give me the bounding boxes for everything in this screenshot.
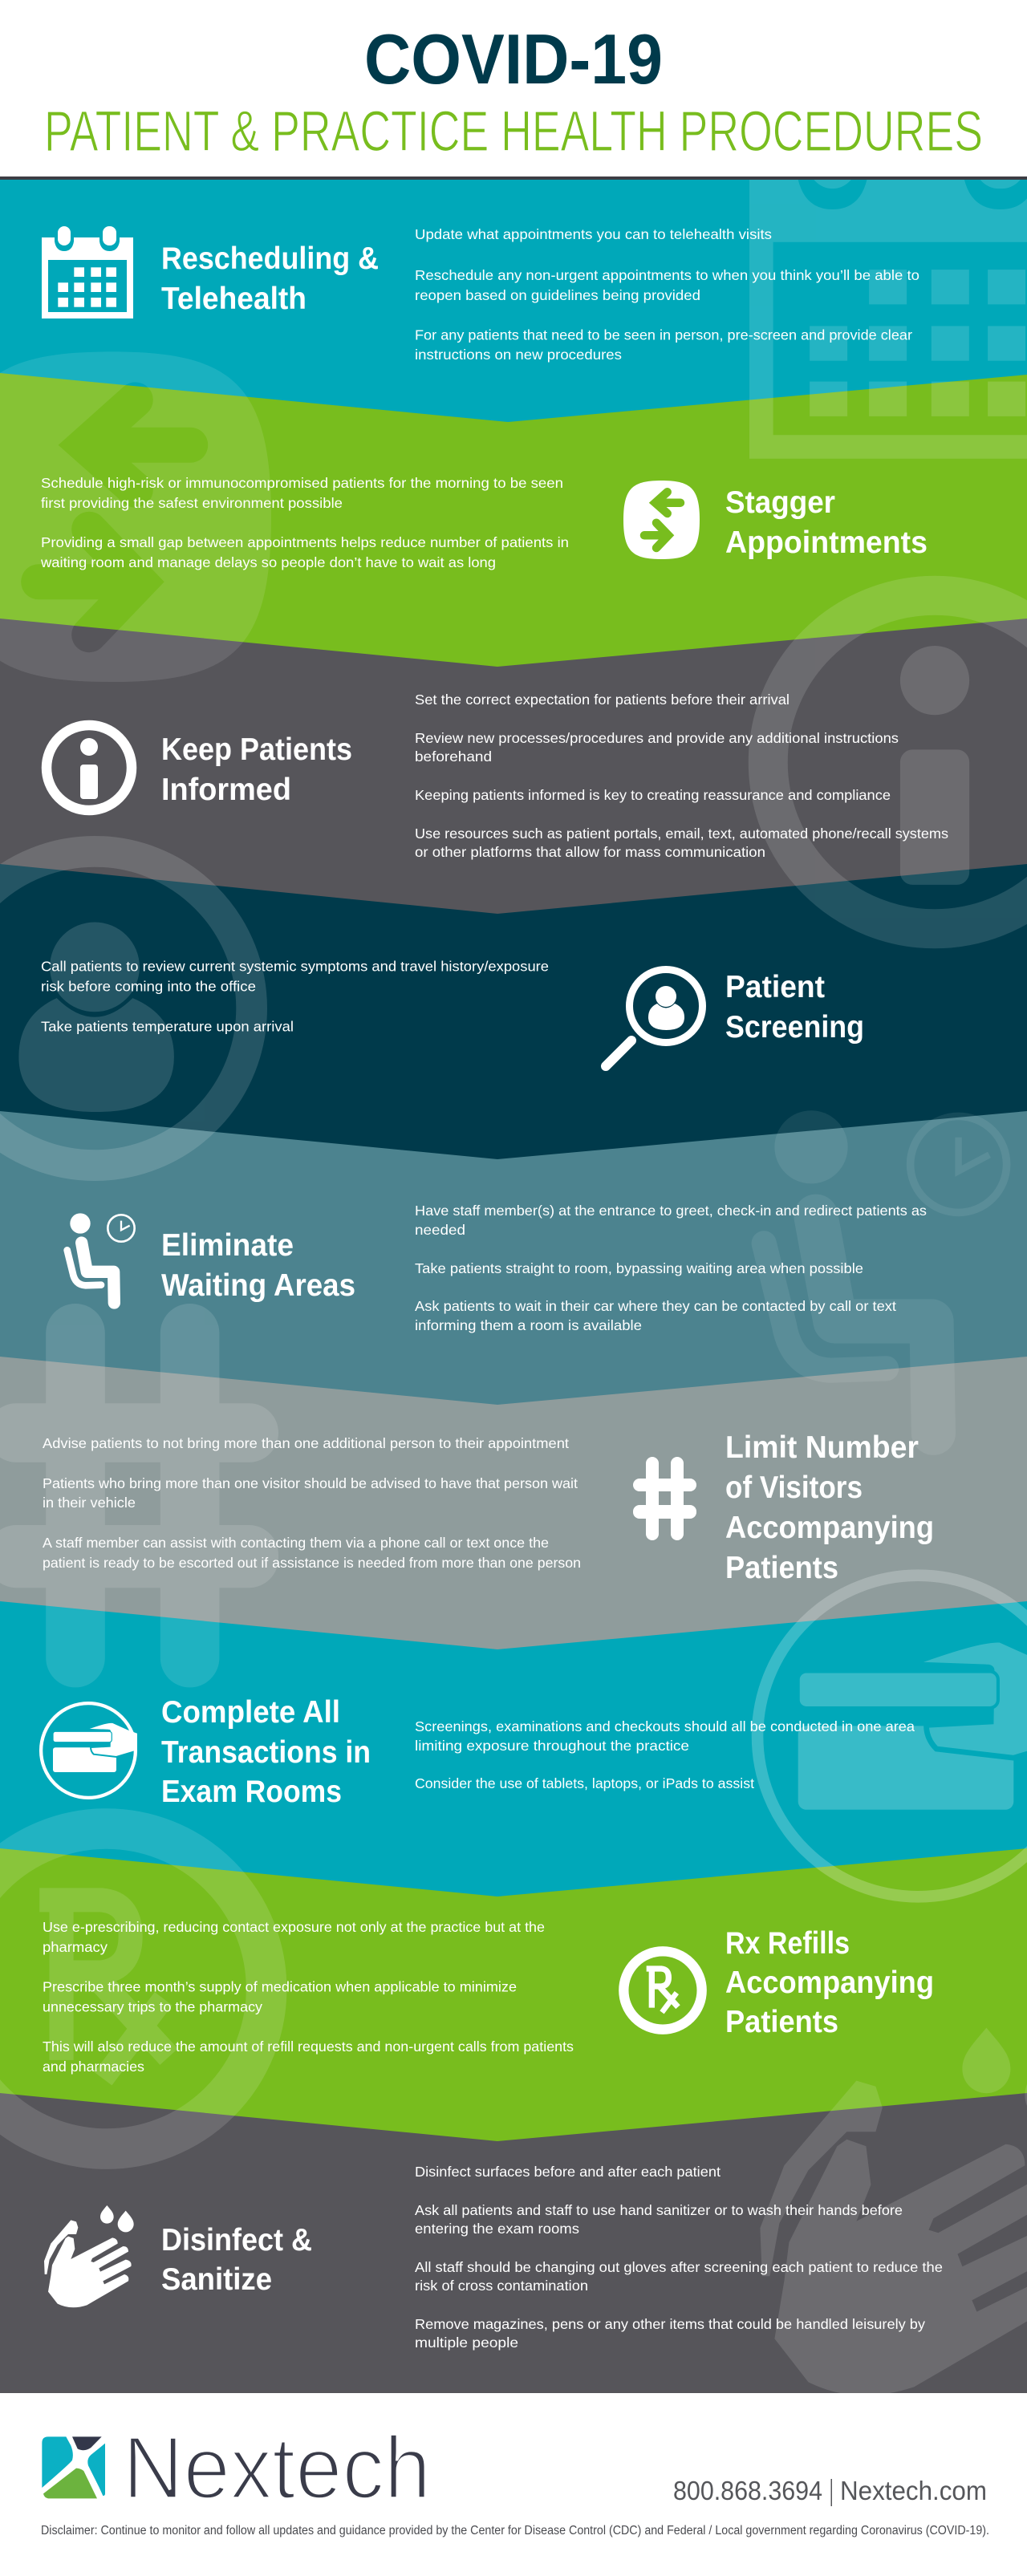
heading: screening: Patient — [725, 970, 825, 1004]
icon: washing hand — [44, 2205, 134, 2307]
text: disinfect points: Remove magazines, pens or any other items that could be handled leisurely by — [415, 2316, 925, 2332]
panel background: informed grey band — [0, 619, 1027, 923]
text: waiting points: Ask patients to wait in their car where they can be contacted by call or text — [415, 1298, 896, 1314]
text: refills points — [43, 1919, 574, 2075]
text: screening points: risk before coming into the office — [41, 979, 256, 995]
heading: informed: Keep Patients — [161, 732, 352, 767]
text: refills points: unnecessary trips to the pharmacy — [43, 1999, 262, 2015]
header — [0, 0, 1027, 180]
icon: Rx — [623, 1951, 702, 2030]
text: visitors points: Advise patients to not bring more than one additional person to their appointment — [43, 1435, 569, 1451]
heading: visitors: Limit Number — [725, 1430, 919, 1465]
text: informed points: Use resources such as patient portals, email, text, automated phone/recall systems — [415, 826, 948, 842]
heading: disinfect: Sanitize — [161, 2262, 272, 2297]
heading: visitors: Patients — [725, 1551, 838, 1585]
text: rescheduling points: Update what appointments you can to telehealth visits — [415, 226, 772, 242]
heading: transactions: Exam Rooms — [161, 1775, 342, 1809]
panel background: transactions teal band — [0, 1601, 1027, 1901]
logo wordmark: Nextech — [123, 2419, 431, 2517]
watermark: large hash — [0, 1304, 278, 1687]
text: screening points — [41, 958, 549, 1035]
watermark: large Rx — [0, 1829, 266, 2149]
watermark: large info symbol — [768, 595, 1027, 929]
watermark: large credit card — [741, 1561, 1027, 1911]
text: disinfect points: multiple people — [415, 2335, 518, 2351]
text: rescheduling points: instructions on new procedures — [415, 347, 622, 363]
panel: keep patients informed — [47, 692, 948, 860]
watermark: large calendar — [749, 117, 1027, 459]
heading: disinfect: Disinfect & — [161, 2223, 312, 2258]
text: visitors points: Patients who bring more than one visitor should be advised to have that person wait — [43, 1475, 578, 1491]
text: rescheduling points: reopen based on guidelines being provided — [415, 287, 700, 303]
heading: waiting: Waiting Areas — [161, 1268, 355, 1303]
watermark: large seated person — [696, 1089, 1027, 1479]
text: screening points: Call patients to review current systemic symptoms and travel history/exposure — [41, 958, 549, 974]
text: disinfect points: Ask all patients and staff to use hand sanitizer or to wash their hands before — [415, 2202, 903, 2218]
text: transactions points: limiting exposure throughout the practice — [415, 1738, 689, 1754]
heading: rescheduling: Telehealth — [161, 282, 306, 316]
heading: screening — [725, 970, 864, 1045]
heading: informed: Informed — [161, 773, 291, 807]
panel background: stagger green band — [0, 373, 1027, 674]
heading: transactions: Complete All — [161, 1695, 340, 1730]
text: visitors points: A staff member can assist with contacting them via a phone call or text once the — [43, 1535, 549, 1551]
text: disinfect points: risk of cross contamination — [415, 2278, 588, 2294]
text: refills points: pharmacy — [43, 1939, 108, 1955]
heading: refills: Rx Refills — [725, 1926, 850, 1961]
text: transactions points: Consider the use of tablets, laptops, or iPads to assist — [415, 1775, 754, 1791]
text: refills points: Use e-prescribing, reducing contact exposure not only at the practice but at the — [43, 1919, 545, 1935]
text: stagger points: first providing the safest environment possible — [41, 495, 343, 511]
text: waiting points — [415, 1203, 927, 1333]
text: rescheduling points: For any patients that need to be seen in person, pre-screen and provide clear — [415, 327, 912, 343]
text: refills points: This will also reduce the amount of refill requests and non-urgent calls from patients — [43, 2038, 574, 2055]
text: informed points: Review new processes/procedures and provide any additional instructions — [415, 730, 899, 746]
panel: rx refills — [43, 1919, 934, 2075]
icon: card in hand — [36, 1699, 140, 1802]
panel: disinfect and sanitize — [44, 2164, 943, 2351]
title: COVID-19 — [364, 19, 663, 99]
panel background: waiting slate band — [0, 1111, 1027, 1412]
text: refills points: Prescribe three month’s supply of medication when applicable to minimize — [43, 1978, 517, 1994]
heading: rescheduling — [161, 241, 379, 316]
text: waiting points: Have staff member(s) at the entrance to greet, check-in and redirect patients as — [415, 1203, 927, 1219]
text: waiting points: needed — [415, 1222, 465, 1238]
heading: visitors: of Visitors — [725, 1471, 863, 1505]
icon: calendar — [42, 226, 133, 318]
heading: transactions: Transactions in — [161, 1735, 371, 1770]
text: rescheduling points — [415, 226, 919, 363]
text: disinfect points: entering the exam rooms — [415, 2221, 579, 2237]
text: disinfect points: All staff should be changing out gloves after screening each patient to reduce the — [415, 2259, 943, 2275]
text: stagger points — [40, 475, 569, 570]
text: informed points: Set the correct expectation for patients before their arrival — [415, 692, 790, 708]
text: stagger points: Schedule high-risk or immunocompromised patients for the morning to be seen — [41, 475, 563, 491]
panel: complete all transactions in exam rooms — [36, 1695, 915, 1809]
contact line — [673, 2476, 987, 2506]
panel: eliminate waiting areas — [48, 1203, 927, 1333]
text: waiting points: informing them a room is available — [415, 1317, 642, 1333]
watermark: large washing hand — [760, 2028, 1027, 2395]
heading: waiting: Eliminate — [161, 1228, 294, 1263]
text: informed points — [415, 692, 948, 860]
contact line: Nextech.com — [840, 2476, 987, 2505]
panel background: refills green band — [0, 1848, 1027, 2150]
contact line: 800.868.3694 — [673, 2476, 822, 2505]
text: refills points: and pharmacies — [43, 2059, 144, 2075]
text: informed points: or other platforms that allow for mass communication — [415, 844, 765, 860]
panel: rescheduling and telehealth — [42, 226, 919, 363]
heading: refills: Accompanying — [725, 1965, 934, 2000]
icon: seated person with clock — [48, 1207, 152, 1316]
icon: Nextech logo mark — [42, 2436, 105, 2498]
text: disinfect points: Disinfect surfaces before and after each patient — [415, 2164, 721, 2180]
heading: transactions — [161, 1695, 371, 1809]
text: screening points: Take patients temperature upon arrival — [41, 1019, 294, 1035]
text: transactions points: Screenings, examinations and checkouts should all be conducted in one area — [415, 1718, 915, 1734]
icon: info — [47, 725, 132, 810]
panel background: visitors grey band — [0, 1357, 1027, 1653]
text: informed points: Keeping patients informed is key to creating reassurance and compliance — [415, 787, 891, 803]
heading: disinfect — [161, 2223, 312, 2297]
heading: screening: Screening — [725, 1010, 864, 1045]
panel background: sanitize grey band — [0, 2093, 1027, 2393]
heading: visitors: Accompanying — [725, 1511, 934, 1545]
heading: waiting — [161, 1228, 355, 1303]
panel: patient screening — [41, 958, 864, 1066]
text: stagger points: waiting room and manage delays so people don’t have to wait as long — [40, 554, 496, 570]
heading: stagger: Stagger — [725, 485, 835, 520]
footer — [0, 2393, 1027, 2576]
text: visitors points: in their vehicle — [43, 1495, 136, 1511]
panel: stagger appointments — [40, 475, 928, 570]
heading: rescheduling: Rescheduling & — [161, 241, 379, 276]
text: disinfect points — [415, 2164, 943, 2351]
text: stagger points: Providing a small gap between appointments helps reduce number of patients in — [41, 534, 569, 550]
watermark: large stagger arrows — [0, 339, 298, 696]
heading: informed — [161, 732, 352, 807]
text: transactions points — [415, 1718, 915, 1791]
icon: hash — [633, 1457, 696, 1540]
icon: stagger arrows — [618, 477, 706, 562]
text: waiting points: Take patients straight to room, bypassing waiting area when possible — [415, 1260, 863, 1276]
panel: limit number of visitors — [43, 1430, 934, 1585]
text: visitors points — [43, 1435, 581, 1571]
panel background: rescheduling teal band — [0, 180, 1027, 436]
text: visitors points: patient is ready to be escorted out if assistance is needed from more than one person — [43, 1555, 581, 1571]
heading: stagger: Appointments — [725, 525, 928, 560]
watermark: large patient search — [0, 851, 252, 1268]
text: informed points: beforehand — [415, 748, 492, 765]
heading: stagger — [725, 485, 928, 560]
heading: visitors — [725, 1430, 934, 1585]
panel background: screening navy band — [0, 864, 1027, 1163]
icon: magnifier with person — [606, 969, 703, 1066]
heading: refills — [725, 1926, 934, 2039]
heading: refills: Patients — [725, 2005, 838, 2039]
text: rescheduling points: Reschedule any non-urgent appointments to when you think you’ll be able to — [415, 267, 919, 283]
